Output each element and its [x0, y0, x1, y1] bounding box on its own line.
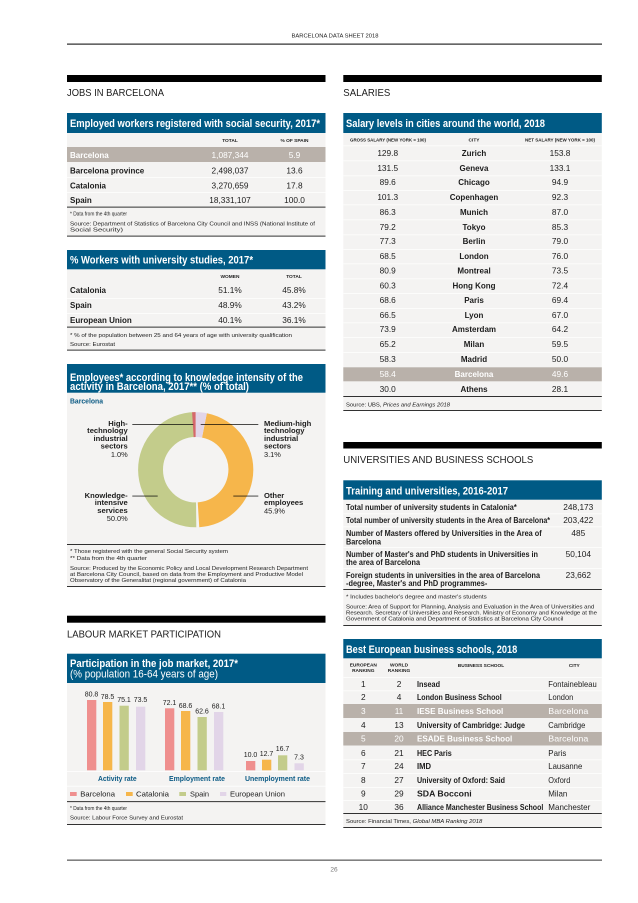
panel title: training — [343, 480, 602, 500]
panel: salary levels table: Montreal — [457, 267, 491, 276]
panel title: employed workers: Employed workers registered with social security, 2017* — [70, 118, 321, 130]
label: knowledge-intensive: intensive — [95, 498, 128, 507]
panel: salary levels table: Amsterdam — [452, 325, 496, 334]
section heading: jobs in Barcelona — [67, 75, 326, 99]
panel: best European business schools: Fontainebleau — [548, 679, 597, 689]
panel: training and universities: Number of Masters offered by Universities in the Area of — [346, 529, 542, 538]
panel: salary levels table: GROSS SALARY (NEW YORK = 100) — [350, 138, 426, 144]
panel: salary levels table: Geneva — [460, 164, 489, 173]
panel: salary levels table: 49.6 — [552, 369, 568, 379]
panel: salary levels table: 86.3 — [380, 207, 396, 217]
panel: salary levels table: 80.9 — [380, 266, 396, 276]
panel title: university studies: % Workers with university studies, 2017* — [70, 254, 254, 266]
bar chart: 68.1 — [212, 704, 225, 710]
label: knowledge-intensive: 50.0% — [107, 514, 128, 523]
panel: best European business schools: 20 — [394, 734, 404, 744]
legend: Barcelona — [80, 790, 116, 798]
panel: salary levels table: Berlin — [463, 237, 485, 246]
panel: salary levels table: Copenhagen — [450, 193, 498, 202]
label: high-technology: industrial — [94, 434, 128, 443]
panel: best European business schools: Paris — [548, 748, 566, 758]
panel: best European business schools: 27 — [394, 775, 404, 785]
panel: workers with university studies: 45.8% — [282, 285, 306, 295]
label: knowledge-intensive — [85, 491, 128, 523]
panel title: salary levels — [343, 113, 602, 133]
panel title: participation: Participation in the job market, 2017* — [70, 658, 239, 670]
label: medium-high technology — [264, 419, 312, 459]
panel: employed workers table: Catalonia — [70, 182, 107, 190]
panel: workers with university studies — [67, 250, 326, 350]
bar chart: 72.1 — [163, 700, 176, 707]
panel: workers with university studies: WOMEN — [221, 274, 240, 280]
panel: best European business schools: IMD — [417, 762, 431, 771]
panel: salary levels table: 64.2 — [552, 324, 568, 334]
panel: salary levels table: 79.2 — [380, 222, 396, 232]
panel: salary levels table: 68.6 — [380, 295, 396, 305]
panel: salary levels table: Tokyo — [463, 223, 486, 232]
panel: workers with university studies: TOTAL — [286, 274, 302, 280]
panel: best European business schools: 2 — [361, 692, 366, 702]
panel: best European business schools: RANKING — [388, 668, 410, 674]
panel: training and universities: Foreign students in universities in the area of Barcelona — [346, 571, 540, 580]
section heading: universities and business schools — [343, 442, 602, 466]
panel: employed workers table: * Data from the 4th quarter — [70, 212, 127, 218]
panel: training and universities: 248,173 — [563, 502, 594, 512]
panel: salary levels table: 77.3 — [380, 236, 396, 246]
panel: employed workers table: Social Security) — [70, 227, 123, 233]
panel: participation in the job market — [67, 654, 326, 825]
bar chart: 7.3 — [294, 754, 304, 762]
bar chart: 78.5 — [101, 694, 114, 701]
panel: workers with university studies: * % of the population between 25 and 64 years of age with university qualification — [70, 333, 292, 339]
section heading: salaries — [343, 75, 602, 99]
panel title: knowledge intensity: Employees* according to knowledge intensity of the — [70, 372, 303, 384]
panel: best European business schools: 2 — [397, 679, 402, 689]
panel: employees by knowledge intensity: Source: Produced by the Economic Policy and Local Development Research Department — [70, 566, 309, 572]
panel: salary levels table: 133.1 — [550, 163, 571, 173]
section heading: jobs in Barcelona: JOBS IN BARCELONA — [67, 88, 164, 99]
panel: employees by knowledge intensity — [67, 364, 326, 587]
panel: salary levels table: 66.5 — [380, 310, 396, 320]
panel: best European business schools — [343, 639, 602, 828]
panel: best European business schools: Alliance Manchester Business School — [417, 803, 543, 812]
donut chart — [143, 417, 249, 523]
panel: best European business schools: 8 — [361, 775, 366, 785]
panel: training and universities: -degree, Master's and PhD programmes- — [346, 579, 488, 588]
bar chart: 68.6 — [179, 703, 192, 710]
panel: salary levels table: 79.0 — [552, 236, 568, 246]
panel: employed workers table: 18,331,107 — [209, 195, 251, 205]
panel: salary levels table: Paris — [464, 296, 484, 305]
panel: best European business schools: CITY — [569, 663, 581, 669]
panel title: knowledge intensity: activity in Barcelona, 2017** (% of total) — [70, 381, 249, 393]
panel: training and universities: 485 — [571, 528, 586, 538]
panel: employed workers table: Barcelona province — [70, 166, 145, 176]
panel: salary levels table: 94.9 — [552, 177, 568, 187]
panel: salary levels table: 65.2 — [380, 339, 396, 349]
panel: salary levels table: Source: UBS, Prices and Earnings 2018 — [346, 402, 450, 408]
panel: employees by knowledge intensity: Observatory of the Generalitat (regional government) of Catalonia — [70, 578, 246, 584]
panel: best European business schools: 36 — [394, 802, 404, 812]
panel: employed workers table: 100.0 — [284, 195, 305, 205]
panel: employed workers table: 13.6 — [286, 166, 303, 176]
panel: participation in the job market: Source: Labour Force Survey and Eurostat — [70, 816, 184, 822]
legend: European Union — [230, 790, 285, 798]
panel title: business schools: Best European business schools, 2018 — [346, 644, 517, 656]
panel title: participation: (% population 16-64 years of age) — [70, 668, 218, 680]
panel: best European business schools: 4 — [397, 692, 402, 702]
panel: salary levels table: 73.5 — [552, 266, 568, 276]
label: high-technology: technology — [87, 426, 128, 435]
label: high-technology — [87, 419, 128, 459]
panel: salary levels table: 73.9 — [380, 324, 396, 334]
panel: best European business schools: Oxford — [548, 775, 571, 785]
panel: best European business schools: 29 — [394, 788, 404, 798]
section heading: salaries: SALARIES — [343, 88, 391, 99]
panel: salary levels table — [343, 113, 602, 411]
panel: employed workers table: Barcelona — [70, 151, 109, 160]
panel title: participation — [67, 654, 326, 683]
panel: best European business schools: 7 — [361, 761, 366, 771]
label: medium-high technology: technology — [264, 426, 305, 435]
label: other employees: employees — [264, 498, 303, 507]
label: other employees — [264, 491, 303, 516]
panel: training and universities: Research. Secretary of Universities and Research. Ministry of Economy and Knowledge at the — [346, 611, 597, 617]
panel: employed workers table: 17.8 — [286, 180, 303, 190]
panel: salary levels table: Milan — [464, 340, 484, 349]
label: knowledge-intensive: services — [97, 506, 128, 515]
panel: best European business schools: BUSINESS SCHOOL — [458, 663, 504, 669]
panel: salary levels table: 30.0 — [380, 384, 396, 394]
label: medium-high technology: Medium-high — [264, 419, 312, 428]
panel: employed workers table: % OF SPAIN — [281, 138, 309, 144]
legend: Catalonia — [136, 790, 170, 798]
panel: salary levels table: 59.5 — [552, 339, 568, 349]
panel: employees by knowledge intensity: * Those registered with the general Social Security system — [70, 549, 229, 555]
panel: best European business schools: SDA Bocconi — [417, 790, 472, 798]
panel: best European business schools: 10 — [359, 802, 368, 812]
panel: workers with university studies: 36.1% — [282, 315, 306, 325]
panel: salary levels table: 85.3 — [552, 222, 568, 232]
panel: salary levels table: 87.0 — [552, 207, 568, 217]
panel: workers with university studies: 40.1% — [218, 315, 242, 325]
panel: training and universities: 23,662 — [566, 570, 591, 580]
panel: salary levels table: 92.3 — [552, 192, 568, 202]
panel: training and universities: 50,104 — [566, 549, 591, 559]
panel: workers with university studies: Catalonia — [70, 286, 107, 295]
panel: salary levels table: CITY — [469, 138, 480, 144]
panel: best European business schools: 21 — [394, 748, 404, 758]
section heading: labour market participation: LABOUR MARKET PARTICIPATION — [67, 630, 221, 640]
panel: best European business schools: Insead — [417, 680, 440, 689]
panel: best European business schools: 1 — [361, 679, 366, 689]
bar chart: 62.6 — [195, 708, 209, 716]
panel: salary levels table: Madrid — [461, 355, 487, 364]
panel: employed workers table: TOTAL — [222, 138, 238, 144]
panel: best European business schools: IESE Business School — [417, 707, 503, 716]
legend — [70, 790, 285, 798]
panel: employed workers table: 5.9 — [289, 150, 301, 160]
panel: salary levels table: 50.0 — [552, 354, 568, 364]
axis labels: Employment rate — [169, 774, 225, 783]
panel: employees by knowledge intensity: Barcelona — [70, 396, 104, 406]
leader lines — [132, 424, 258, 496]
panel: salary levels table: 89.6 — [380, 177, 396, 187]
panel: best European business schools: 6 — [361, 748, 366, 758]
panel: salary levels table: Zurich — [462, 149, 486, 158]
panel: employees by knowledge intensity: ** Data from the 4th quarter — [70, 556, 147, 562]
axis labels: Activity rate — [98, 774, 137, 783]
panel: salary levels table: 60.3 — [380, 280, 396, 290]
panel: best European business schools: 24 — [394, 761, 404, 771]
panel: salary levels table: 101.3 — [377, 192, 398, 202]
panel: best European business schools: EUROPEAN — [350, 662, 377, 668]
panel: best European business schools: Milan — [548, 788, 568, 798]
panel: salary levels table: 58.3 — [380, 354, 396, 364]
panel title: university studies — [67, 250, 326, 269]
panel: best European business schools: ESADE Business School — [417, 734, 512, 744]
bar chart — [85, 692, 304, 770]
panel: salary levels table: 129.8 — [377, 148, 398, 158]
panel: best European business schools: Cambridge — [548, 720, 586, 730]
panel: best European business schools: 4 — [361, 720, 366, 730]
panel: employed workers table: Source: Department of Statistics of Barcelona City Council and INSS (National Institute of — [70, 222, 316, 228]
panel title: employed workers — [67, 113, 326, 133]
panel: salary levels table: 72.4 — [552, 280, 568, 290]
panel: training and universities — [343, 480, 602, 626]
panel: best European business schools: London — [548, 692, 574, 702]
panel: employed workers table: 1,087,344 — [212, 150, 249, 160]
panel: best European business schools: London Business School — [417, 693, 502, 702]
page footer: 26 — [330, 866, 338, 874]
panel: training and universities: 203,422 — [563, 515, 594, 525]
panel: workers with university studies: European Union — [70, 316, 132, 325]
section heading: universities and business schools: UNIVERSITIES AND BUSINESS SCHOOLS — [343, 455, 534, 466]
panel: training and universities: Total number of university students in Catalonia* — [346, 503, 518, 512]
panel: training and universities: the area of Barcelona — [346, 558, 420, 567]
page header: BARCELONA DATA SHEET 2018 — [292, 34, 378, 40]
panel: participation in the job market: * Data from the 4th quarter — [70, 806, 127, 812]
panel: workers with university studies: 43.2% — [282, 300, 306, 310]
panel: salary levels table: Chicago — [458, 178, 490, 187]
panel title: knowledge intensity — [67, 364, 326, 393]
panel: salary levels table: Munich — [460, 208, 488, 217]
panel: best European business schools: 5 — [361, 734, 366, 744]
panel: workers with university studies: 51.1% — [218, 285, 242, 295]
panel: training and universities: * Includes bachelor's degree and master's students — [346, 595, 487, 601]
panel: salary levels table: Hong Kong — [452, 281, 496, 290]
panel: salary levels table: Barcelona — [455, 370, 494, 379]
bar chart: 73.5 — [134, 697, 147, 704]
panel: salary levels table: 67.0 — [552, 310, 568, 320]
panel: employed workers table: Spain — [70, 196, 92, 205]
panel: best European business schools: University of Oxford: Said — [417, 776, 505, 785]
bar chart: 16.7 — [276, 746, 289, 753]
panel: salary levels table: Lyon — [465, 311, 484, 320]
panel: salary levels table: Athens — [460, 385, 488, 394]
axis labels — [98, 774, 310, 783]
panel: employed workers table: 3,270,659 — [212, 180, 249, 190]
bar chart: 10.0 — [244, 752, 257, 759]
bar chart: 75.1 — [117, 697, 131, 704]
panel: best European business schools: HEC Paris — [417, 749, 452, 758]
panel: best European business schools: 3 — [361, 706, 366, 716]
panel: best European business schools: Lausanne — [548, 761, 583, 771]
label: medium-high technology: 3.1% — [264, 450, 281, 459]
label: knowledge-intensive: Knowledge- — [85, 491, 128, 500]
panel: best European business schools: Barcelona — [548, 706, 589, 716]
panel: training and universities: Barcelona — [346, 538, 381, 546]
bar chart: 80.8 — [85, 692, 98, 698]
panel: employees by knowledge intensity: at Barcelona City Council, based on data from the Employment and Productive Model — [70, 572, 303, 578]
label: high-technology: High- — [108, 419, 128, 428]
panel: salary levels table: 76.0 — [552, 251, 568, 261]
panel: best European business schools: WORLD — [390, 662, 409, 668]
panel: salary levels table: 153.8 — [550, 148, 571, 158]
label: medium-high technology: sectors — [264, 442, 291, 450]
panel: salary levels table: 58.4 — [380, 369, 396, 379]
panel: best European business schools: Barcelona — [548, 734, 589, 744]
label: other employees: Other — [264, 491, 284, 500]
panel: workers with university studies: 48.9% — [218, 300, 242, 310]
panel: salary levels table: 69.4 — [552, 295, 568, 305]
panel: salary levels table: London — [459, 252, 489, 261]
panel: best European business schools: University of Cambridge: Judge — [417, 721, 525, 730]
panel: salary levels table: 68.5 — [380, 251, 396, 261]
panel: best European business schools: 9 — [361, 788, 366, 798]
bar chart: 12.7 — [260, 751, 273, 758]
label: medium-high technology: industrial — [264, 434, 298, 443]
axis labels: Unemployment rate — [245, 774, 310, 783]
panel: best European business schools: 11 — [395, 706, 404, 716]
panel: training and universities: Total number of university students in the Area of Barcelona* — [346, 516, 551, 525]
panel: workers with university studies: Spain — [70, 301, 92, 310]
panel: best European business schools: Manchester — [548, 802, 591, 812]
panel: workers with university studies: Source: Eurostat — [70, 342, 116, 348]
legend: Spain — [190, 790, 209, 798]
panel: best European business schools: RANKING — [352, 668, 375, 674]
panel: salary levels table: 131.5 — [377, 163, 398, 173]
panel: employed workers table — [67, 113, 326, 236]
panel: salary levels table: 28.1 — [552, 384, 568, 394]
label: high-technology: sectors — [101, 442, 128, 450]
panel: salary levels table: NET SALARY (NEW YORK = 100) — [525, 138, 595, 144]
panel: training and universities: Government of Catalonia and Department of Statistics at Barcelona City Council — [346, 617, 563, 623]
panel: best European business schools: 13 — [394, 720, 404, 730]
panel title: training: Training and universities, 2016-2017 — [346, 486, 508, 498]
panel: best European business schools: Source: Financial Times, Global MBA Ranking 2018 — [346, 819, 482, 825]
panel: training and universities: Source: Area of Support for Planning, Analysis and Evaluation in the Area of Universities and — [346, 605, 594, 611]
panel: employed workers table: 2,498,037 — [212, 166, 249, 176]
panel: training and universities: Number of Master's and PhD students in Universities in — [346, 550, 538, 559]
section heading: labour market participation — [67, 616, 326, 640]
panel title: business schools — [343, 639, 602, 658]
label: other employees: 45.9% — [264, 506, 285, 516]
panel title: salary levels: Salary levels in cities around the world, 2018 — [346, 118, 545, 130]
label: high-technology: 1.0% — [111, 450, 128, 459]
